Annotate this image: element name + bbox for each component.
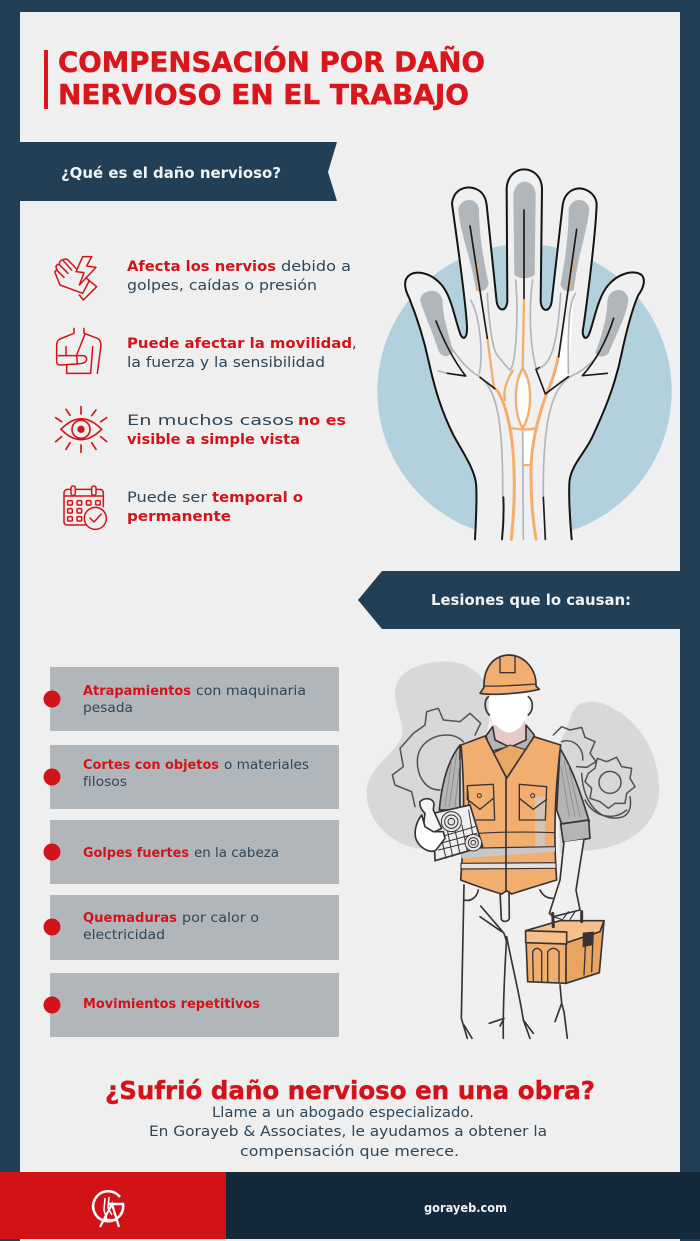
text: not visible: visible a simple vista (127, 432, 300, 448)
logo (93, 1191, 123, 1227)
illustration: hand nerves (377, 169, 672, 542)
safety vest (461, 736, 561, 894)
item: head blows (44, 820, 339, 884)
item: head blows: Golpes fuertes (83, 846, 189, 861)
item: cuts: filosos (83, 775, 127, 790)
item: burns: electricidad (83, 928, 165, 943)
text: temporary or permanent: temporal o (212, 490, 303, 506)
panel: injuries list (44, 667, 339, 1037)
item: cuts (44, 745, 339, 809)
banner: injuries that cause it (358, 571, 680, 629)
text: affects nerves (127, 259, 351, 294)
panel: nerve damage facts (55, 257, 357, 529)
item: entrapment (44, 667, 339, 731)
text: mobility (127, 336, 357, 371)
title: NERVIOSO EN EL TRABAJO (58, 79, 469, 111)
item: entrapment: con maquinaria (196, 684, 306, 699)
gears (392, 708, 635, 818)
call to action: ¿Sufrió daño nervioso en una obra? (105, 1076, 595, 1105)
icon: eye (56, 407, 107, 452)
item: cuts: Cortes con objetos (83, 758, 219, 773)
call to action: compensación que merece. (240, 1144, 459, 1160)
white gaps (517, 292, 574, 465)
banner: what is nerve damage (20, 142, 337, 201)
icon: calendar with check (64, 486, 106, 529)
item: burns (44, 895, 339, 960)
text: affects nerves: debido a (281, 259, 351, 275)
text: mobility: Puede afectar la movilidad (127, 336, 352, 352)
grey tendons (438, 280, 611, 539)
item: entrapment: pesada (83, 701, 133, 716)
illustration: construction worker (367, 655, 659, 1038)
orange nerves (477, 248, 573, 539)
hand outline (405, 169, 644, 539)
text: not visible: En muchos casos (127, 413, 294, 429)
gloved hand (415, 815, 445, 851)
call to action: En Gorayeb & Associates, le ayudamos a obtener la (149, 1124, 547, 1140)
banner: injuries that cause it: Lesiones que lo causan: (431, 591, 631, 609)
text: not visible (127, 413, 346, 448)
text: temporary or permanent: Puede ser (127, 490, 207, 506)
item: burns: Quemaduras (83, 911, 177, 926)
hand fill (405, 169, 644, 542)
toolbox (526, 912, 604, 983)
item: repetitive movements: Movimientos repetitivos (83, 997, 260, 1012)
call to action: Llame a un abogado especializado. (212, 1105, 474, 1121)
text: temporary or permanent (127, 490, 303, 525)
text: mobility: la fuerza y la sensibilidad (127, 355, 325, 371)
tool panel held in arm (420, 799, 483, 861)
text: temporary or permanent: permanente (127, 509, 231, 525)
head (488, 693, 528, 733)
item: burns: por calor o (182, 911, 259, 926)
neck and collar (492, 722, 527, 757)
hard hat (480, 655, 539, 694)
icon: hand with lightning (55, 257, 97, 300)
item: head blows: en la cabeza (194, 846, 279, 861)
black nerve strokes (436, 210, 614, 539)
title: COMPENSACIÓN POR DAÑO (58, 44, 485, 78)
banner: what is nerve damage: ¿Qué es el daño nervioso? (61, 164, 281, 182)
text: not visible: no es (298, 413, 346, 429)
shirt sleeves (439, 745, 460, 810)
call to action (105, 1076, 595, 1160)
arm and pants (460, 883, 567, 1038)
text: mobility: , (352, 336, 357, 352)
footer (0, 1172, 700, 1239)
text: affects nerves: golpes, caídas o presión (127, 278, 317, 294)
item: cuts: o materiales (224, 758, 309, 773)
title (44, 44, 485, 111)
item: entrapment: Atrapamientos (83, 684, 191, 699)
text: affects nerves: Afecta los nervios (127, 259, 276, 275)
background blobs (367, 661, 493, 850)
item: repetitive movements (44, 973, 339, 1037)
website: gorayeb.com (424, 1201, 507, 1215)
blue circle (377, 244, 672, 538)
fingertip bones (420, 291, 453, 356)
icon: arm in sling (57, 328, 101, 373)
arm (549, 839, 584, 917)
